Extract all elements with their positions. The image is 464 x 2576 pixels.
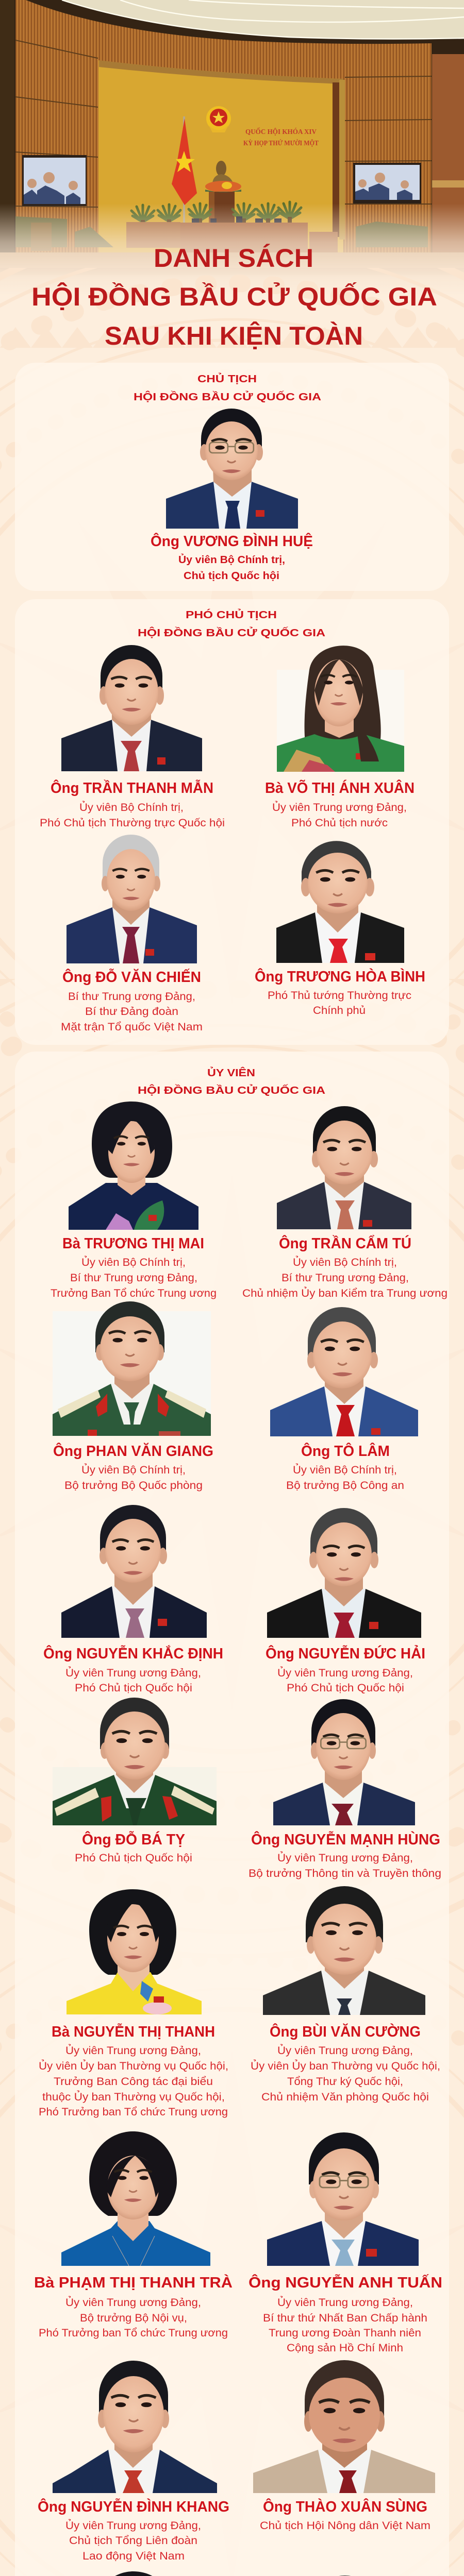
person: Trương Hòa Bình	[255, 841, 425, 1016]
person: Tô Lâm	[270, 1307, 418, 1492]
role: Chủ nhiệm Văn phòng Quốc hội	[261, 2091, 429, 2103]
role	[248, 1852, 441, 1879]
person: Nguyễn Mạnh Hùng: Ông NGUYỄN MẠNH HÙNG	[251, 1831, 440, 1848]
person: Nguyễn Văn Được	[245, 2575, 445, 2576]
person: Trần Cẩm Tú: Ông TRẦN CẨM TÚ	[279, 1234, 411, 1252]
role: Trưởng Ban Tổ chức Trung ương	[51, 1287, 217, 1299]
portrait	[276, 841, 404, 963]
role: Ủy viên Trung ương Đảng,	[277, 2044, 413, 2057]
role	[242, 1256, 448, 1299]
left screen	[22, 155, 87, 206]
role: Chủ tịch Quốc hội	[184, 570, 279, 582]
panel: chairman	[15, 363, 449, 591]
heading: vice chairmen: PHÓ CHỦ TỊCH	[186, 608, 277, 621]
role	[65, 2519, 201, 2562]
portrait	[263, 2575, 430, 2576]
role	[51, 1256, 217, 1299]
role: Phó Thủ tướng Thường trực	[268, 990, 411, 1002]
role: Phó Chủ tịch Quốc hội	[287, 1682, 404, 1694]
role	[286, 1464, 404, 1492]
title: HỘI ĐỒNG BẦU CỬ QUỐC GIA	[31, 282, 437, 311]
person: Đỗ Bá Tỵ: Ông ĐỖ BÁ TỴ	[82, 1831, 185, 1848]
person: Nguyễn Anh Tuấn	[248, 2132, 442, 2354]
person: Phạm Thị Thanh Trà	[34, 2131, 233, 2339]
portrait	[53, 1698, 217, 1825]
role: Phó Trưởng ban Tổ chức Trung ương	[39, 2106, 228, 2118]
portrait	[263, 1886, 425, 2015]
role	[39, 2296, 228, 2339]
role: Phó Trưởng ban Tổ chức Trung ương	[39, 2327, 228, 2339]
role: Bí thư Trung ương Đảng,	[281, 1272, 409, 1284]
person: Nguyễn Khắc Định	[43, 1505, 223, 1694]
role: Ủy viên Trung ương Đảng,	[277, 1852, 413, 1864]
person: Nguyễn Đình Khang: Ông NGUYỄN ĐÌNH KHANG	[38, 2498, 229, 2515]
role: Ủy viên Trung ương Đảng,	[65, 1667, 201, 1679]
portrait	[61, 645, 202, 771]
role: thuộc Ủy ban Thường vụ Quốc hội,	[42, 2091, 225, 2103]
portrait	[53, 2361, 217, 2493]
portrait	[267, 2132, 419, 2266]
person: Bùi Văn Cường: Ông BÙI VĂN CƯỜNG	[270, 2023, 421, 2040]
role: Bí thư thứ Nhất Ban Chấp hành	[263, 2312, 427, 2324]
person: Hà Thị Nga	[51, 2571, 210, 2576]
person: Thào Xuân Sùng: Ông THÀO XUÂN SÙNG	[263, 2498, 427, 2515]
portrait	[53, 1301, 211, 1436]
role: Bộ trưởng Bộ Nội vụ,	[80, 2312, 187, 2324]
left dark pillar	[0, 0, 14, 252]
person: Trương Thị Mai	[51, 1101, 217, 1299]
portrait	[267, 1508, 421, 1638]
portrait	[51, 2571, 210, 2576]
wall sign: KỲ HỌP THỨ MƯỜI MỘT	[243, 139, 319, 147]
role: Tổng Thư ký Quốc hội,	[287, 2076, 403, 2088]
hero fade	[0, 204, 464, 309]
role: Bộ trưởng Bộ Công an	[286, 1480, 404, 1492]
heading: chairman	[134, 372, 321, 403]
role: Chính phủ	[313, 1005, 366, 1016]
panel: members	[15, 1052, 449, 2576]
role: Chủ tịch Hội Nông dân Việt Nam	[260, 2520, 430, 2532]
role	[277, 1667, 413, 1694]
role: Ủy viên Trung ương Đảng,	[277, 2296, 413, 2309]
role	[39, 2044, 228, 2118]
role: Trung ương Đoàn Thanh niên	[269, 2327, 421, 2339]
role: Lao động Việt Nam	[82, 2550, 185, 2562]
wall sign	[243, 127, 319, 147]
portrait	[67, 1889, 202, 2014]
portrait	[61, 2131, 210, 2266]
portrait	[69, 1101, 198, 1230]
person: Nguyễn Đức Hải: Ông NGUYỄN ĐỨC HẢI	[266, 1645, 425, 1662]
role	[64, 1464, 203, 1492]
role	[178, 553, 285, 582]
portrait	[277, 646, 404, 772]
person: Trương Hòa Bình: Ông TRƯƠNG HÒA BÌNH	[255, 968, 425, 985]
role	[263, 2296, 427, 2354]
portrait	[166, 409, 298, 529]
portrait	[277, 1106, 411, 1229]
role: Phó Chủ tịch Thường trực Quốc hội	[40, 817, 225, 829]
person: Nguyễn Đình Khang	[38, 2361, 229, 2562]
role: Cộng sản Hồ Chí Minh	[287, 2342, 403, 2354]
role	[40, 801, 225, 829]
person: Võ Thị Ánh Xuân	[265, 646, 415, 829]
person: Bùi Văn Cường	[251, 1886, 440, 2103]
role: Ủy viên Trung ương Đảng,	[272, 801, 407, 814]
role: Ủy viên Bộ Chính trị,	[293, 1464, 397, 1476]
role: Bộ trưởng Thông tin và Truyền thông	[248, 1868, 441, 1879]
person: Phạm Thị Thanh Trà: Bà PHẠM THỊ THANH TRÀ	[34, 2274, 233, 2291]
bust and podium	[205, 161, 241, 223]
role: Phó Chủ tịch Quốc hội	[75, 1682, 192, 1694]
person: Nguyễn Thị Thanh	[39, 1889, 228, 2118]
role: Ủy viên Trung ương Đảng,	[65, 2519, 201, 2532]
person: Vương Đình Huệ: Ông VƯƠNG ĐÌNH HUỆ	[151, 532, 313, 550]
role: Ủy viên Trung ương Đảng,	[65, 2296, 201, 2309]
person: Phan Văn Giang: Ông PHAN VĂN GIANG	[53, 1442, 213, 1460]
emblem	[206, 106, 231, 132]
role: Phó Chủ tịch nước	[291, 817, 388, 829]
role: Chủ nhiệm Ủy ban Kiểm tra Trung ương	[242, 1287, 448, 1299]
person: Trương Thị Mai: Bà TRƯƠNG THỊ MAI	[62, 1235, 204, 1252]
portrait	[273, 1699, 415, 1825]
role: Ủy viên Bộ Chính trị,	[293, 1256, 397, 1268]
role: Ủy viên Trung ương Đảng,	[65, 2044, 201, 2057]
person: Nguyễn Khắc Định: Ông NGUYỄN KHẮC ĐỊNH	[43, 1645, 223, 1662]
role: Bí thư Đảng đoàn	[85, 1006, 178, 1018]
person: Trần Thanh Mẫn: Ông TRẦN THANH MẪN	[51, 779, 213, 796]
person: Võ Thị Ánh Xuân: Bà VÕ THỊ ÁNH XUÂN	[265, 779, 415, 796]
panel: vice chairmen	[15, 599, 449, 1045]
role	[268, 990, 411, 1016]
role	[61, 991, 203, 1033]
role	[272, 801, 407, 829]
title: SAU KHI KIỆN TOÀN	[105, 321, 363, 350]
role: Ủy viên Bộ Chính trị,	[178, 553, 285, 566]
role	[65, 1667, 201, 1694]
right screen	[353, 163, 421, 204]
heading: members	[138, 1066, 325, 1096]
role: Mặt trận Tổ quốc Việt Nam	[61, 1021, 203, 1033]
role: Ủy viên Ủy ban Thường vụ Quốc hội,	[251, 2060, 440, 2072]
person: Đỗ Văn Chiến: Ông ĐỖ VĂN CHIẾN	[62, 968, 201, 986]
person: Đỗ Bá Tỵ	[53, 1698, 217, 1864]
flag	[172, 116, 197, 242]
portrait	[61, 1505, 207, 1638]
role: Bí thư Trung ương Đảng,	[68, 991, 195, 1003]
role	[251, 2044, 440, 2103]
title	[31, 244, 437, 350]
heading: chairman: CHỦ TỊCH	[197, 372, 257, 385]
role: Ủy viên Bộ Chính trị,	[79, 801, 184, 814]
portrait	[270, 1307, 418, 1436]
person: Trần Thanh Mẫn	[40, 645, 225, 829]
hero photo: National Assembly hall	[0, 0, 464, 309]
wall sign: QUỐC HỘI KHÓA XIV	[245, 127, 317, 136]
person: Nguyễn Mạnh Hùng	[248, 1699, 441, 1879]
role: Ủy viên Bộ Chính trị,	[81, 1464, 186, 1476]
role: Phó Chủ tịch Quốc hội	[75, 1852, 192, 1864]
role: Trưởng Ban Công tác đại biểu	[54, 2076, 213, 2088]
heading: vice chairmen	[138, 608, 325, 639]
heading: members: HỘI ĐỒNG BẦU CỬ QUỐC GIA	[138, 1084, 325, 1096]
person: Đỗ Văn Chiến	[61, 835, 203, 1033]
person: Vương Đình Huệ	[151, 409, 313, 582]
portrait	[253, 2360, 435, 2493]
heading: members: ỦY VIÊN	[207, 1066, 255, 1079]
person: Nguyễn Đức Hải	[266, 1508, 425, 1694]
role: Ủy viên Bộ Chính trị,	[81, 1256, 186, 1268]
role: Chủ tịch Tổng Liên đoàn	[69, 2535, 197, 2547]
person: Nguyễn Thị Thanh: Bà NGUYỄN THỊ THANH	[52, 2023, 215, 2040]
person: Phan Văn Giang	[53, 1301, 213, 1492]
title: DANH SÁCH	[154, 244, 313, 273]
heading: vice chairmen: HỘI ĐỒNG BẦU CỬ QUỐC GIA	[138, 626, 325, 639]
person: Tô Lâm: Ông TÔ LÂM	[301, 1442, 390, 1460]
role: Ủy viên Trung ương Đảng,	[277, 1667, 413, 1679]
role: Bí thư Trung ương Đảng,	[70, 1272, 197, 1284]
role: Bộ trưởng Bộ Quốc phòng	[64, 1480, 203, 1492]
portrait	[67, 835, 197, 963]
person: Trần Cẩm Tú	[242, 1106, 448, 1299]
role: Ủy viên Ủy ban Thường vụ Quốc hội,	[39, 2060, 228, 2072]
person: Nguyễn Anh Tuấn: Ông NGUYỄN ANH TUẤN	[248, 2274, 442, 2291]
person: Thào Xuân Sùng	[253, 2360, 435, 2532]
heading: chairman: HỘI ĐỒNG BẦU CỬ QUỐC GIA	[134, 391, 321, 403]
plants and desks	[0, 202, 464, 309]
